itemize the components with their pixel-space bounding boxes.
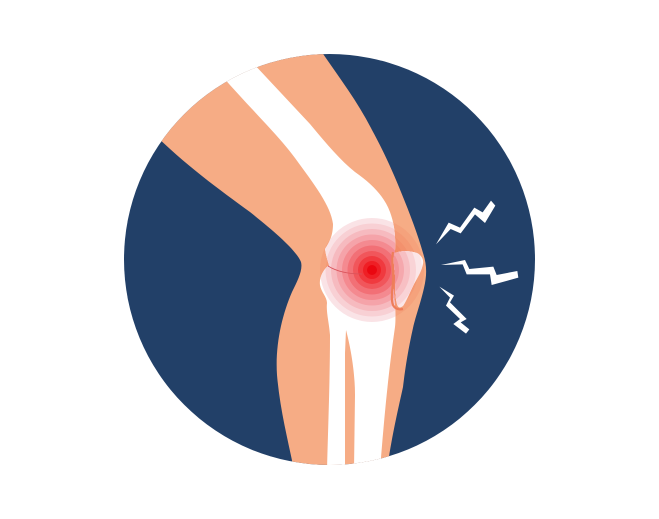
bolt: middle	[441, 260, 518, 285]
patella	[394, 251, 424, 308]
infographic: knee pain illustration	[124, 54, 535, 465]
bolt: lower	[439, 287, 469, 334]
leg skin	[150, 45, 426, 470]
joint line	[328, 266, 362, 274]
icon: pain lightning bolts	[436, 201, 518, 334]
patella groove	[392, 252, 403, 309]
leg illustration	[150, 45, 426, 470]
femur	[222, 62, 395, 268]
pain rings on knee	[320, 218, 396, 322]
tibia and fibula	[320, 262, 395, 470]
background circle	[124, 54, 535, 465]
bolt: upper	[436, 201, 495, 244]
pain glow on skin	[320, 223, 424, 316]
